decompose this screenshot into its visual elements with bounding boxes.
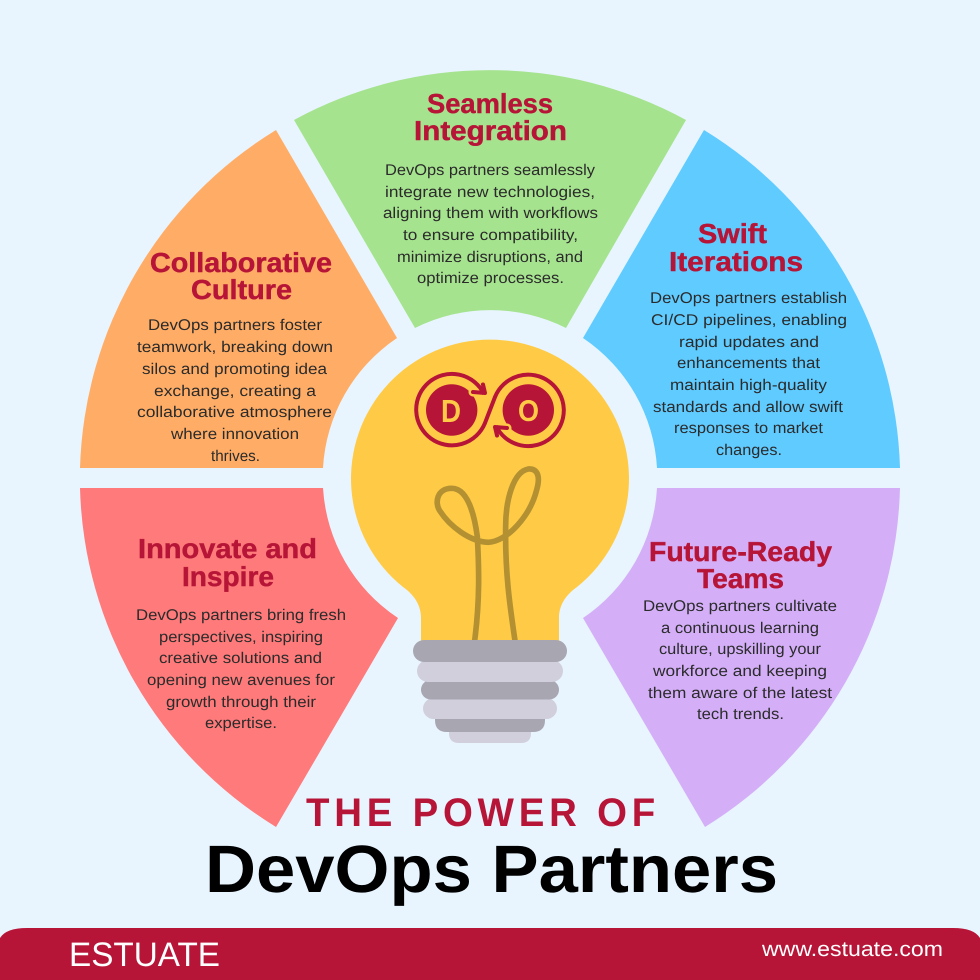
text: Seamless Integration description: aligning them with workflows [383,205,598,222]
icon: light bulb [351,340,629,743]
heading: Swift Iterations: Iterations [669,246,803,277]
panel: Collaborative Culture [80,130,397,468]
icon: DevOps logo: O [518,395,539,428]
heading: Seamless Integration: Integration [414,115,567,146]
text: Collaborative Culture description: teamwork, breaking down [137,339,333,356]
bulb screw base [413,640,567,743]
heading: Future-Ready Teams: Teams [697,563,784,594]
heading: Seamless Integration [414,88,567,146]
text: Innovate and Inspire description: expertise. [205,715,277,732]
text: Swift Iterations description: enhancements that [677,355,821,372]
text: Seamless Integration description [383,162,598,287]
heading: Future-Ready Teams [649,536,833,594]
text: Innovate and Inspire description [136,607,346,732]
text: Seamless Integration description: DevOps partners seamlessly [385,162,595,179]
text: Swift Iterations description [650,290,847,459]
title: THE POWER OF: THE POWER OF [306,791,660,835]
panel: Future-Ready Teams [583,488,900,827]
footer brand: ESTUATE: ESTUATE [69,936,220,974]
bulb glass [351,340,629,641]
icon: DevOps logo: D [441,393,461,429]
panel: Swift Iterations [583,130,900,468]
text: Collaborative Culture description: silos and promoting idea [142,361,327,378]
text: Innovate and Inspire description: growth through their [166,694,316,711]
heading: Innovate and Inspire [138,533,317,592]
heading: Seamless Integration: Seamless [427,88,553,119]
text: Innovate and Inspire description: creative solutions and [159,650,322,667]
heading: Collaborative Culture [150,247,332,305]
text: Collaborative Culture description: DevOps partners foster [148,317,322,334]
text: Innovate and Inspire description: opening new avenues for [147,672,335,689]
text: Seamless Integration description: optimize processes. [417,270,564,287]
text: Swift Iterations description: CI/CD pipelines, enabling [651,312,847,329]
heading: Collaborative Culture: Culture [191,274,292,305]
text: Seamless Integration description: minimize disruptions, and [397,249,583,266]
panel: Innovate and Inspire [80,488,398,827]
text: Swift Iterations description: changes. [716,442,782,459]
text: Swift Iterations description: standards and allow swift [653,399,844,416]
title: DevOps Partners: DevOps Partners [205,832,778,907]
text: Future-Ready Teams description: DevOps partners cultivate [643,598,837,615]
heading: Swift Iterations [669,218,803,277]
footer bar [0,928,980,980]
heading: Collaborative Culture: Collaborative [150,247,332,278]
heading: Swift Iterations: Swift [698,218,767,249]
text: Future-Ready Teams description [643,598,837,723]
text: Future-Ready Teams description: them aware of the latest [648,685,833,702]
heading: Future-Ready Teams: Future-Ready [649,536,833,567]
panel: Seamless Integration [294,70,686,328]
text: Swift Iterations description: responses to market [674,420,824,437]
text: Seamless Integration description: to ensure compatibility, [403,227,578,244]
footer website: www.estuate.com [761,938,943,961]
text: Collaborative Culture description: collaborative atmosphere [137,404,332,421]
text: Future-Ready Teams description: workforce and keeping [652,663,827,680]
text: Collaborative Culture description: thrives. [211,448,260,465]
text: Innovate and Inspire description: perspectives, inspiring [159,629,323,646]
text: Collaborative Culture description: exchange, creating a [154,383,316,400]
icon: DevOps logo [416,374,564,446]
text: Seamless Integration description: integrate new technologies, [385,184,595,201]
text: Swift Iterations description: maintain high-quality [670,377,827,394]
text: Innovate and Inspire description: DevOps partners bring fresh [136,607,346,624]
text: Swift Iterations description: DevOps partners establish [650,290,847,307]
text: Collaborative Culture description: where innovation [170,426,299,443]
heading: Innovate and Inspire: Innovate and [138,533,317,564]
heading: Innovate and Inspire: Inspire [182,561,274,592]
bulb filament [437,469,538,641]
text: Future-Ready Teams description: a continuous learning [661,620,819,637]
text: Future-Ready Teams description: culture, upskilling your [659,641,821,658]
text: Swift Iterations description: rapid updates and [679,334,819,351]
text: Future-Ready Teams description: tech trends. [697,706,784,723]
text: Collaborative Culture description [137,317,333,465]
